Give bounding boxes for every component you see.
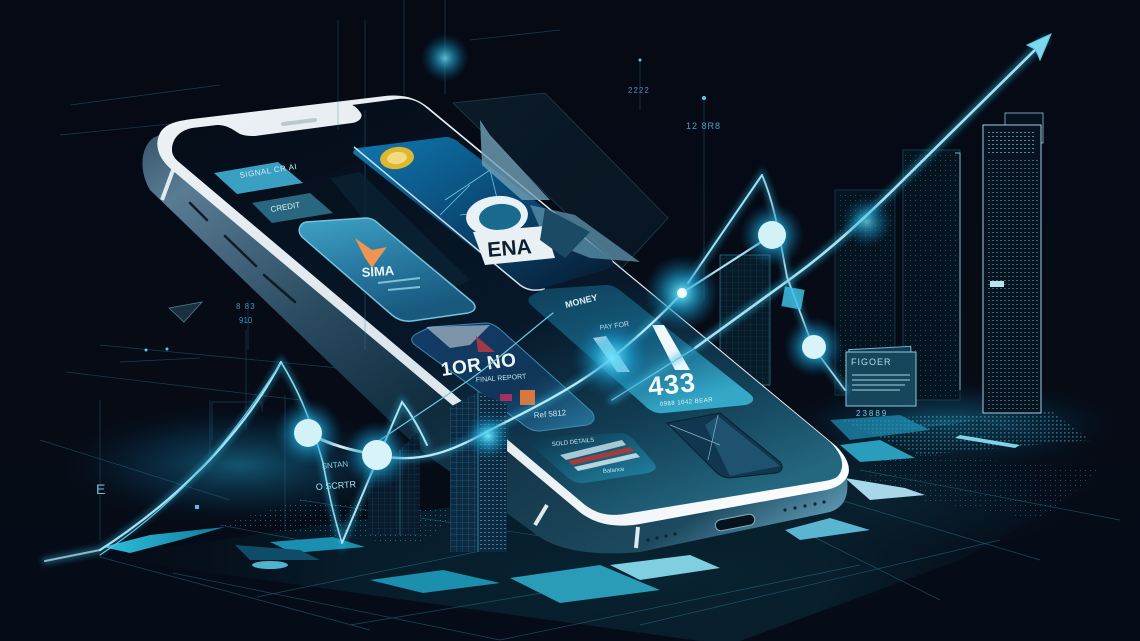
app card: 10R NO: [412, 323, 594, 431]
app card: top blue card: [353, 137, 613, 290]
shard graphic lower: [530, 205, 640, 262]
app card: 10R NO: Ref 5812: [533, 408, 567, 420]
arrowhead: [1027, 34, 1051, 60]
ground glow: [60, 380, 1120, 625]
app card: dark textured card: [667, 413, 782, 478]
app card: dark teal label: [252, 193, 333, 223]
left holographic panel: SNTAN: [321, 459, 349, 471]
left holographic panel: O SCRTR: [315, 479, 357, 492]
small circle markers on background lines: [144, 58, 706, 352]
right skyscrapers: [720, 113, 1043, 413]
app card: 433: MONEY: [564, 292, 599, 310]
left holographic panel: [315, 459, 357, 492]
shard graphic: [480, 120, 550, 200]
upper label 12 8R8: 12 8R8: [686, 121, 721, 131]
small triangle icon: [169, 302, 202, 322]
shadow panel behind cards: [330, 172, 470, 300]
phone screen: [172, 99, 842, 515]
right info panel: FIGOER: [851, 357, 892, 367]
tower 2: [903, 150, 960, 400]
tower 3: [835, 190, 895, 395]
left labels 910: 910: [239, 316, 253, 325]
small glyph left: E: [96, 481, 105, 497]
app card: 10R NO: FINAL REPORT: [476, 373, 527, 384]
app card: blue arrow card: [299, 218, 475, 321]
app card: 433: 0988 1042 BEAR: [660, 397, 714, 408]
chart: left rising line: [45, 293, 682, 561]
app card: teal label: SIGNAL CR AI: [239, 162, 298, 180]
icon: gold coin: [379, 145, 415, 171]
app card: form with stripes: [529, 433, 656, 483]
node: left: [294, 419, 322, 447]
phone: [142, 95, 849, 553]
node: middle: [362, 440, 392, 470]
glow nodes: [274, 34, 893, 489]
right info panel: 23889: [856, 409, 888, 418]
app card: 433: [528, 285, 753, 413]
phone charging port: [714, 513, 756, 532]
icon: orange arrow: [355, 238, 387, 268]
app card: form with stripes: Balance: [603, 467, 625, 475]
app card: blue arrow card: SIMA: [361, 263, 395, 280]
phone antenna bands: [162, 170, 638, 548]
app card: 433: 433: [646, 367, 697, 402]
perspective ground grid with data tiles: [100, 410, 1125, 641]
lock badge: ENA: [486, 235, 533, 262]
tower 1: [983, 113, 1043, 413]
notch speaker: [283, 120, 315, 124]
white bars: [593, 325, 690, 372]
node: upper right: [758, 221, 786, 249]
app card: 10R NO: 1OR NO: [440, 350, 518, 381]
node: lower right: [802, 335, 826, 359]
phone speaker dots: [646, 500, 826, 542]
lock badge: [464, 193, 590, 265]
node: bright hub: [677, 288, 687, 298]
right info panel: [846, 346, 916, 418]
upper label 2222: 2222: [628, 86, 650, 95]
app card: 433: PAY FOR: [599, 321, 630, 332]
phone side body: [142, 110, 847, 553]
chart: right peak line: [682, 175, 845, 390]
app card: dark teal label: CREDIT: [270, 200, 301, 214]
tower 4: [720, 255, 770, 385]
phone white bezel: [157, 95, 849, 526]
front building: [450, 392, 507, 552]
app card: teal label: [214, 162, 303, 194]
chart: main growth arrow: [612, 34, 1051, 400]
background thin lines: [40, 0, 704, 540]
left labels 883: 8 83: [236, 302, 256, 311]
floating glass pane: [453, 93, 668, 268]
thin lines over phone: [338, 100, 365, 350]
second building: [368, 430, 420, 535]
phone side buttons: [190, 203, 295, 302]
app card: form with stripes: SOLD DETAILS: [552, 438, 595, 448]
